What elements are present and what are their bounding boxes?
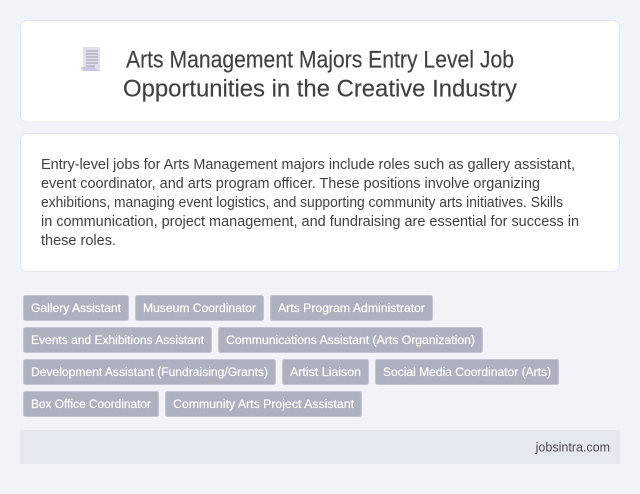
- panel: description: exhibitions, managing event logistics, and supporting community arts initiatives. Skills: [41, 195, 563, 211]
- tag: Social Media Coordinator: [376, 360, 558, 384]
- panel: description: in communication, project management, and fundraising are essential for success in: [41, 214, 579, 230]
- panel: description: these roles.: [41, 233, 116, 249]
- tag: Box Office Coordinator: [24, 392, 158, 416]
- tag: Communications Assistant: Communications Assistant (Arts Organization): [226, 333, 475, 347]
- tag: Artist Liaison: Artist Liaison: [290, 365, 361, 379]
- footer bar: [20, 430, 620, 464]
- title heading: Opportunities in the Creative Industry: [123, 76, 518, 102]
- tag: Social Media Coordinator: Social Media Coordinator (Arts): [383, 365, 551, 379]
- title heading: [123, 46, 518, 102]
- panel: description: Entry-level jobs for Arts Management majors include roles such as gallery assistant,: [41, 157, 575, 173]
- tag: Arts Program Administrator: [270, 296, 432, 320]
- icon: document scroll: [81, 47, 100, 71]
- tag: Gallery Assistant: Gallery Assistant: [31, 301, 122, 315]
- panel: description: [20, 134, 620, 272]
- tag: Artist Liaison: [282, 360, 368, 384]
- tag: Arts Program Administrator: Arts Program Administrator: [278, 301, 425, 315]
- tag: Communications Assistant: [218, 328, 482, 352]
- title heading: Arts Management Majors Entry Level Job: [126, 46, 514, 74]
- tag: Events and Exhibitions Assistant: [24, 328, 212, 352]
- tag: Museum Coordinator: Museum Coordinator: [143, 301, 256, 315]
- tag: Development Assistant: Development Assistant (Fundraising/Grants): [31, 365, 268, 379]
- tag: Events and Exhibitions Assistant: Events and Exhibitions Assistant: [31, 333, 205, 347]
- tag: Museum Coordinator: [136, 296, 264, 320]
- tag: Gallery Assistant: [24, 296, 128, 320]
- tag: Development Assistant: [24, 360, 276, 384]
- tag: Community Arts Project Assistant: Community Arts Project Assistant: [173, 397, 355, 411]
- panel: description: event coordinator, and arts program officer. These positions involve organizing: [41, 176, 540, 192]
- tag: Community Arts Project Assistant: [166, 392, 362, 416]
- tag: Box Office Coordinator: Box Office Coordinator: [31, 397, 151, 411]
- panel: title card: [20, 20, 620, 122]
- footer bar: jobsintra.com: [535, 440, 610, 454]
